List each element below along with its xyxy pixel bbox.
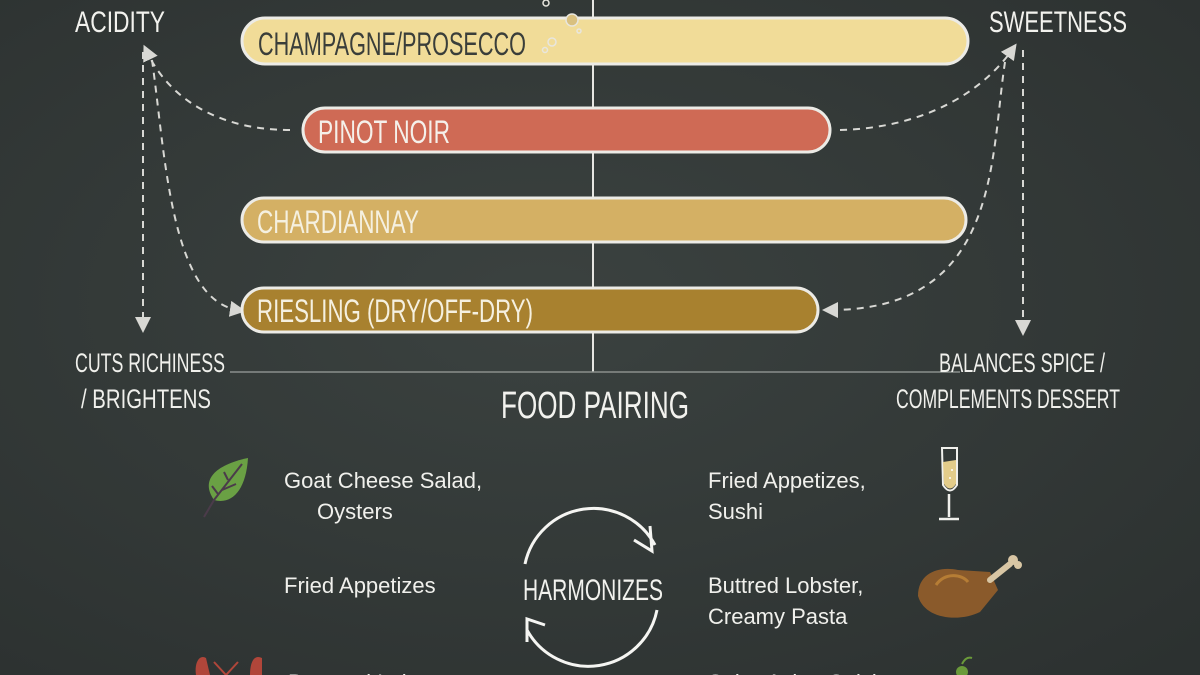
bar: champagne: CHAMPAGNE/PROSECCO <box>258 26 526 62</box>
bar: chardonnay <box>242 198 966 242</box>
caption: sweetness effect: BALANCES SPICE / <box>939 348 1105 378</box>
caption: acidity effect: / BRIGHTENS <box>81 384 211 414</box>
heading: food pairing: FOOD PAIRING <box>501 385 689 427</box>
arrows: sweetness <box>830 50 1023 328</box>
text: buttered lobster <box>708 573 863 629</box>
icon: champagne glass <box>939 448 959 519</box>
label: sweetness: SWEETNESS <box>989 6 1127 39</box>
icon: harmonize cycle <box>525 508 657 666</box>
bar: champagne <box>242 0 968 64</box>
text: harmonizes: HARMONIZES <box>523 574 663 607</box>
bar: chardonnay: CHARDIANNAY <box>257 204 419 240</box>
icon: leaf <box>204 458 248 517</box>
text: fried appetizes sushi: Fried Appetizes, <box>708 468 866 493</box>
caption: acidity effect: CUTS RICHINESS <box>75 348 225 378</box>
text: fried appetizes sushi: Sushi <box>708 499 763 524</box>
caption: acidity effect <box>75 348 225 414</box>
text: goat cheese: Goat Cheese Salad, <box>284 468 482 493</box>
icon: roast chicken <box>918 555 1022 618</box>
text: buttered lobster: Creamy Pasta <box>708 604 848 629</box>
text: cropped bottom lines <box>288 670 901 675</box>
bar: riesling <box>242 288 818 332</box>
icon: pepper (cropped) <box>956 658 972 675</box>
icon: lobster (cropped) <box>196 657 262 675</box>
label: acidity: ACIDITY <box>75 6 165 39</box>
caption: sweetness effect <box>896 348 1120 414</box>
bar: pinot noir <box>303 108 830 152</box>
text: fried appetizes left: Fried Appetizes <box>284 573 436 598</box>
bar: pinot noir: PINOT NOIR <box>318 114 450 150</box>
text: goat cheese <box>284 468 482 524</box>
arrows: acidity <box>143 52 290 325</box>
text: goat cheese: Oysters <box>317 499 393 524</box>
text: buttered lobster: Buttred Lobster, <box>708 573 863 598</box>
bar: riesling: RIESLING (DRY/OFF-DRY) <box>257 293 533 329</box>
text: fried appetizes sushi <box>708 468 866 524</box>
